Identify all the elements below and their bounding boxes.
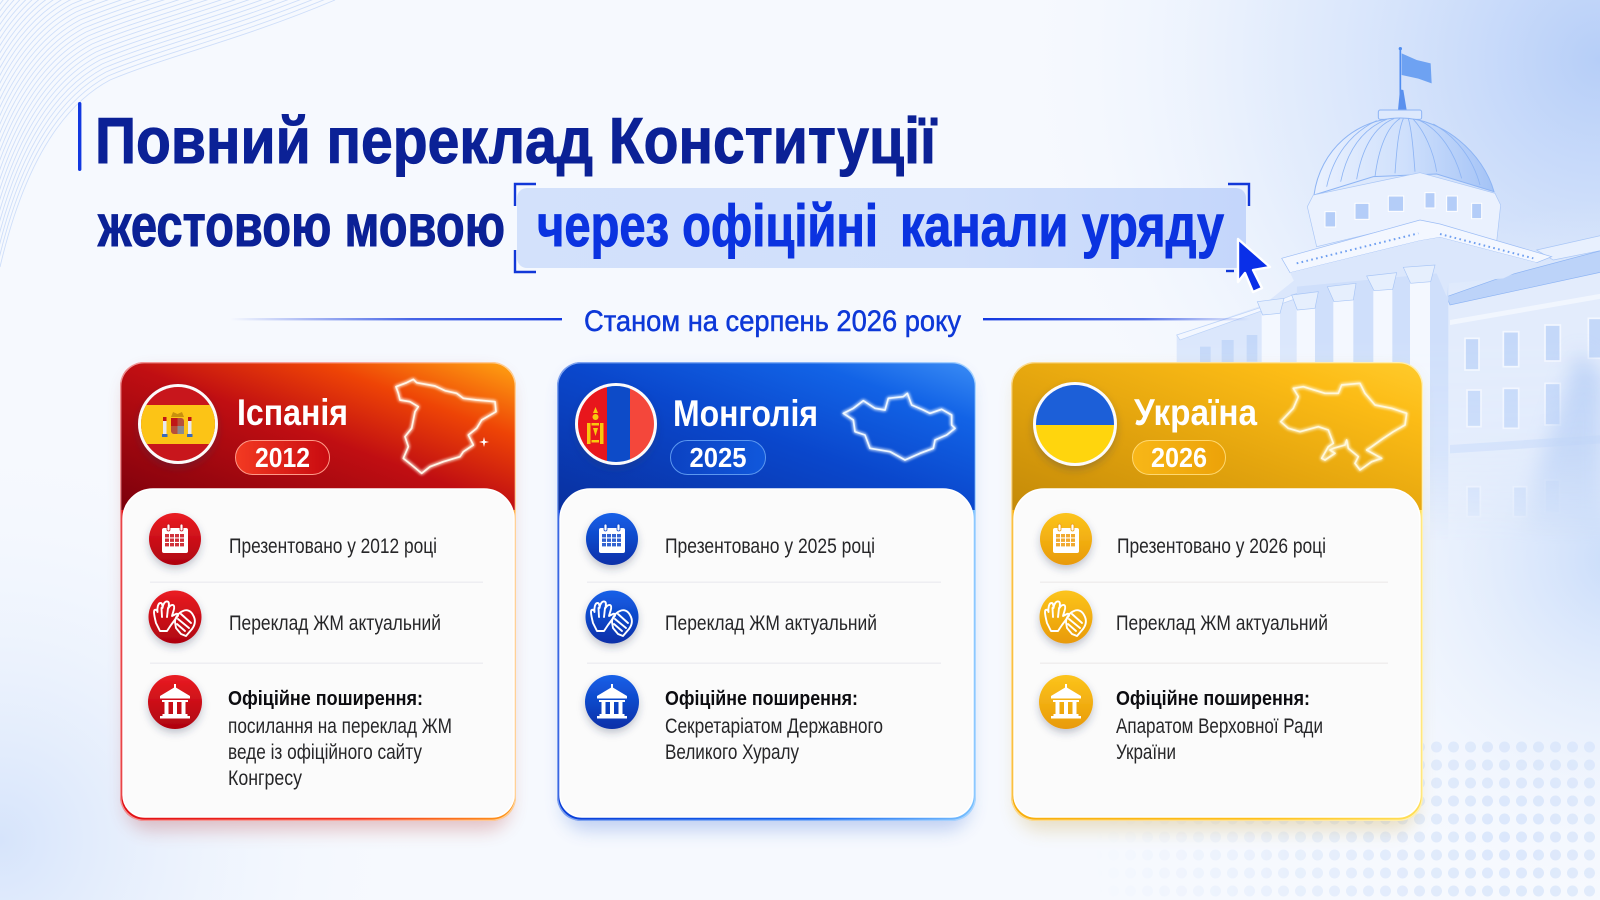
highlighted title phrase [515, 184, 1249, 272]
row: official distribution: Апаратом Верховної Ради [1116, 715, 1323, 738]
row: presented [149, 513, 437, 565]
title line 1: Повний переклад Конституції [95, 104, 938, 177]
row: translation [148, 590, 441, 644]
header [1012, 363, 1422, 510]
year badge: 2025 [690, 442, 746, 473]
title accent bar [78, 102, 81, 171]
year badge [1132, 440, 1226, 474]
panel: Ukraine [1011, 362, 1423, 830]
background wave lines [0, 0, 335, 267]
title line 2: жестовою мовою [97, 193, 505, 259]
row: presented [586, 513, 875, 565]
row: presented: Презентовано у 2025 році [665, 535, 875, 558]
row: presented: Презентовано у 2026 році [1117, 535, 1326, 558]
row: official distribution: веде із офіційного сайту [228, 741, 422, 764]
row: official distribution [585, 675, 883, 764]
row: translation: Переклад ЖМ актуальний [665, 612, 877, 635]
panel: Mongolia [557, 362, 976, 830]
date subtitle: Станом на серпень 2026 року [584, 305, 961, 338]
map: Spain [396, 379, 496, 473]
right wing [1447, 235, 1600, 540]
body [123, 489, 514, 817]
card edge highlight [558, 363, 975, 820]
row: translation [586, 590, 877, 644]
row: official distribution: Офіційне поширення: [665, 687, 858, 710]
row: translation: Переклад ЖМ актуальний [229, 612, 441, 635]
country name: Монголія [673, 393, 818, 434]
panel: Spain [120, 362, 516, 830]
country name: Іспанія [237, 392, 348, 433]
body [560, 489, 973, 817]
row: official distribution: посилання на переклад ЖМ [228, 715, 452, 738]
highlight box [517, 188, 1246, 268]
flag: Ukraine [1033, 382, 1117, 466]
portico [1177, 220, 1552, 540]
year badge [670, 440, 766, 474]
year badge [236, 440, 330, 474]
row: official distribution: України [1116, 741, 1176, 764]
highlighted text: через офіційні [537, 193, 878, 259]
flag: Spain [138, 384, 218, 464]
dome [1314, 110, 1494, 195]
card edge highlight [121, 363, 515, 820]
country name: Україна [1134, 392, 1257, 433]
year badge: 2026 [1151, 442, 1207, 473]
flag: Mongolia [575, 383, 660, 465]
highlighted text [537, 193, 1224, 259]
background dot pattern [1210, 742, 1595, 896]
row: official distribution [1039, 675, 1323, 764]
tree [1534, 352, 1600, 516]
map: Mongolia [843, 393, 955, 460]
title [78, 102, 938, 259]
highlighted text: канали уряду [900, 193, 1224, 259]
header [558, 363, 975, 510]
map: Ukraine [1281, 383, 1407, 470]
row: official distribution: Офіційне поширення: [1116, 687, 1310, 710]
row: official distribution: Секретаріатом Державного [665, 715, 883, 738]
row: official distribution: Великого Хуралу [665, 741, 799, 764]
card edge highlight [1012, 363, 1422, 820]
drum [1307, 173, 1501, 247]
row: presented: Презентовано у 2012 році [229, 535, 437, 558]
row: translation [1040, 590, 1328, 644]
government building illustration [1177, 47, 1600, 540]
row: presented [1040, 513, 1326, 565]
flag [1398, 47, 1432, 110]
header [121, 363, 515, 510]
body [1014, 489, 1420, 817]
icon: mouse cursor [1238, 239, 1270, 292]
decorative star [479, 437, 489, 447]
row: official distribution: Офіційне поширення: [228, 687, 423, 710]
row: official distribution [148, 675, 452, 790]
year badge: 2012 [255, 442, 310, 473]
corner brackets [515, 184, 1249, 272]
row: translation: Переклад ЖМ актуальний [1116, 612, 1328, 635]
row: official distribution: Конгресу [228, 767, 302, 790]
